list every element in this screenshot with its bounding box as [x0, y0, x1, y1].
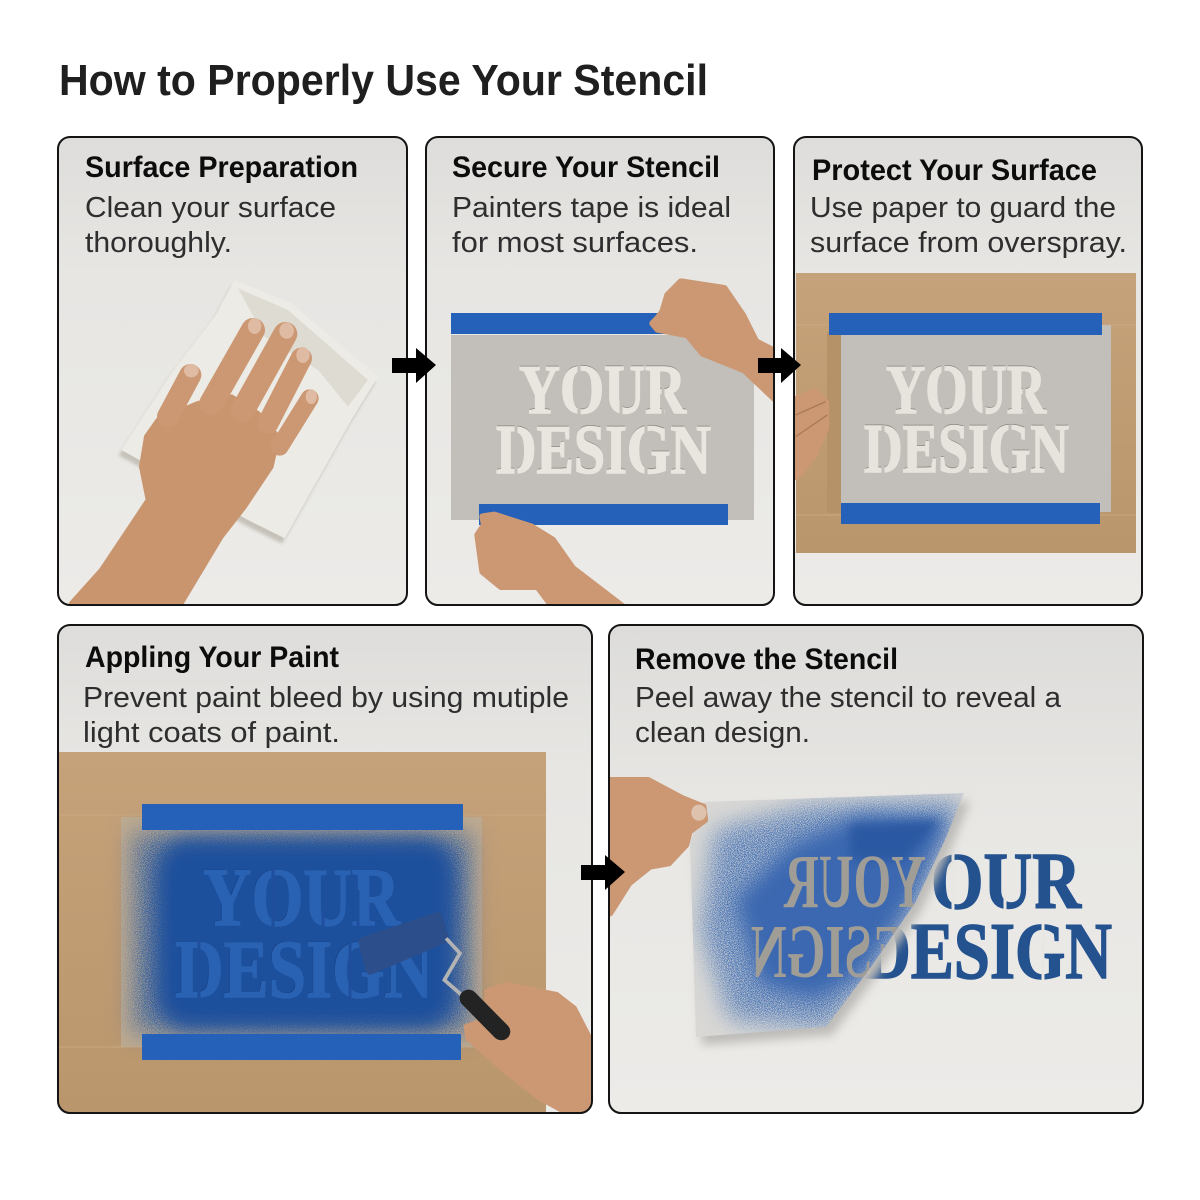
stencil lettering: DESIGN — [174, 922, 432, 1014]
stencil lettering: DESIGN — [496, 412, 711, 489]
panel: secure your stencil — [426, 137, 776, 607]
blue tape — [142, 804, 463, 1060]
text: protect your surface: Use paper to guard the — [810, 192, 1116, 224]
text: remove the stencil — [635, 682, 1062, 749]
stencil lettering: YOUR — [886, 352, 1047, 429]
text: protect your surface — [810, 192, 1127, 259]
text: secure your stencil — [452, 192, 731, 259]
heading: remove the stencil: Remove the Stencil — [635, 643, 898, 676]
text: applying your paint: light coats of paint. — [83, 717, 340, 749]
text: secure your stencil: for most surfaces. — [452, 227, 698, 259]
icon: white towel — [119, 280, 378, 544]
stencil lettering: YOUR — [886, 350, 1047, 428]
stencil lettering: YOUR — [202, 850, 401, 942]
stencil lettering — [864, 365, 1069, 474]
text: surface preparation: thoroughly. — [85, 227, 232, 259]
blue spray — [132, 832, 472, 1034]
kraft side strip — [827, 332, 841, 513]
heading: surface preparation: Surface Preparation — [85, 151, 358, 184]
kraft paper — [796, 273, 1136, 553]
text: remove the stencil: Peel away the stencil to reveal a — [635, 682, 1062, 714]
panel: protect your surface — [794, 137, 1142, 605]
stencil lettering: DESIGN — [175, 923, 433, 1015]
stencil lettering: DESIGN — [864, 410, 1069, 486]
icon: paint roller — [363, 917, 501, 1032]
arrow: step 4 to 5 — [581, 855, 625, 890]
stencil lettering: DESIGN — [496, 410, 711, 488]
peeled stencil: DESIGN — [751, 910, 941, 994]
text: surface preparation — [85, 192, 336, 259]
kraft paper — [59, 752, 546, 1113]
text: applying your paint — [83, 682, 569, 749]
stencil lettering: YOUR — [519, 352, 687, 429]
heading: applying your paint: Appling Your Paint — [85, 641, 339, 674]
peeled stencil: YOUR — [783, 840, 926, 924]
text: protect your surface: surface from overspray. — [810, 227, 1127, 259]
text: remove the stencil: clean design. — [635, 717, 810, 749]
panel: surface preparation — [58, 137, 407, 605]
stencil lettering: YOUR — [519, 350, 687, 428]
painted design: DESIGN — [864, 908, 1112, 996]
peeled stencil — [690, 793, 970, 1045]
stencil sheet — [838, 325, 1111, 512]
arrow: step 1 to 2 — [392, 348, 436, 383]
stencil sheet — [451, 335, 754, 520]
panel: remove the stencil — [609, 625, 1143, 1113]
icon: hand top right — [653, 282, 776, 400]
painted design: OUR — [931, 838, 1082, 926]
panel: applying your paint — [58, 625, 593, 1117]
stencil lettering: DESIGN — [864, 411, 1069, 488]
stencil sheet — [121, 817, 482, 1047]
icon: hand holding roller — [467, 985, 593, 1117]
icon: hand bottom left — [478, 515, 623, 607]
heading: protect your surface: Protect Your Surface — [812, 154, 1097, 187]
icon: hand left — [794, 390, 827, 478]
arrow: step 2 to 3 — [758, 348, 801, 383]
stencil lettering — [496, 365, 711, 474]
blue tape — [451, 313, 728, 525]
text: secure your stencil: Painters tape is ideal — [452, 192, 731, 224]
stencil lettering — [175, 870, 427, 999]
text: applying your paint: Prevent paint bleed by using mutiple — [83, 682, 569, 714]
heading: secure your stencil: Secure Your Stencil — [452, 151, 720, 184]
icon: hand wiping — [71, 318, 317, 603]
blue tape — [829, 313, 1102, 524]
stencil lettering: YOUR — [203, 851, 401, 943]
painted design — [864, 854, 1112, 980]
text: surface preparation: Clean your surface — [85, 192, 336, 224]
icon: hand peeling — [610, 780, 706, 913]
title: How to Properly Use Your Stencil — [59, 56, 708, 105]
